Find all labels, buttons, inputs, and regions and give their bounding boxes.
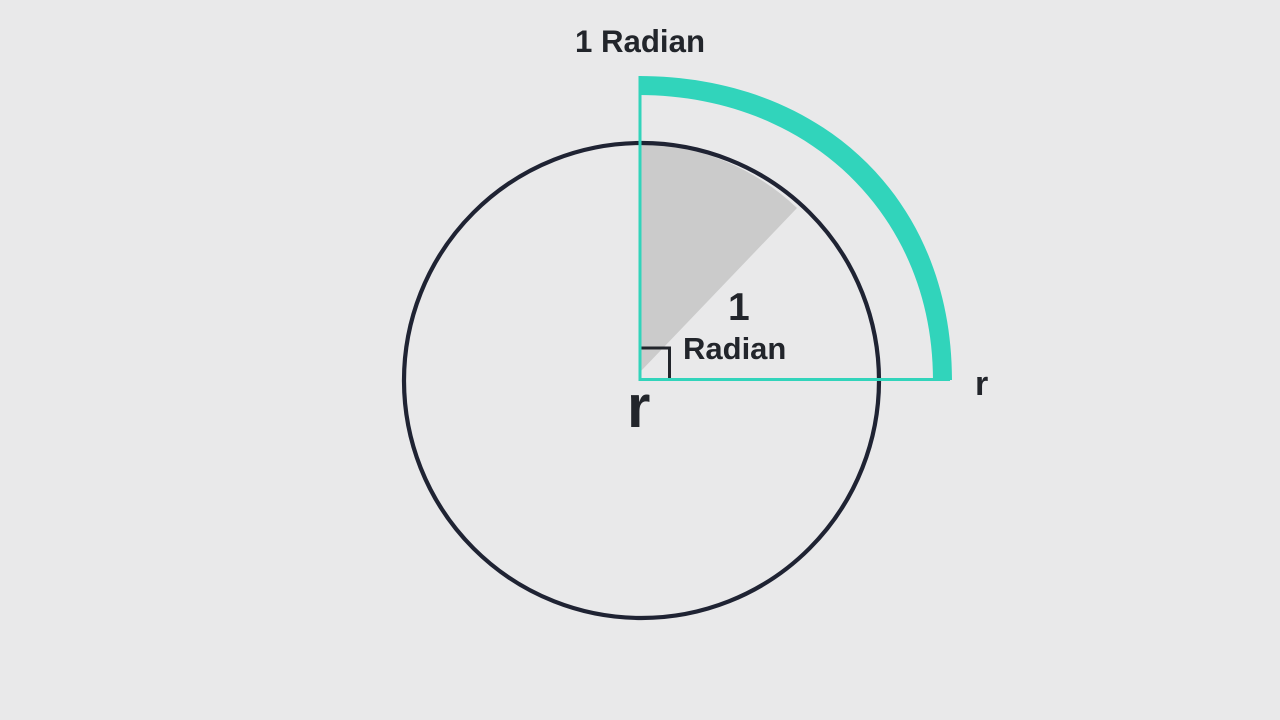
circle: [404, 143, 879, 618]
teal arc: [638, 76, 952, 380]
outer radius label: r: [975, 365, 988, 403]
shaded sector: [641, 143, 797, 371]
angle unit: Radian: [683, 331, 786, 366]
arc label: 1 Radian: [575, 24, 705, 59]
right angle marker: [641, 348, 670, 379]
radius label: r: [627, 373, 650, 440]
teal radius lines: [640, 76, 950, 380]
angle value: 1: [728, 286, 750, 329]
